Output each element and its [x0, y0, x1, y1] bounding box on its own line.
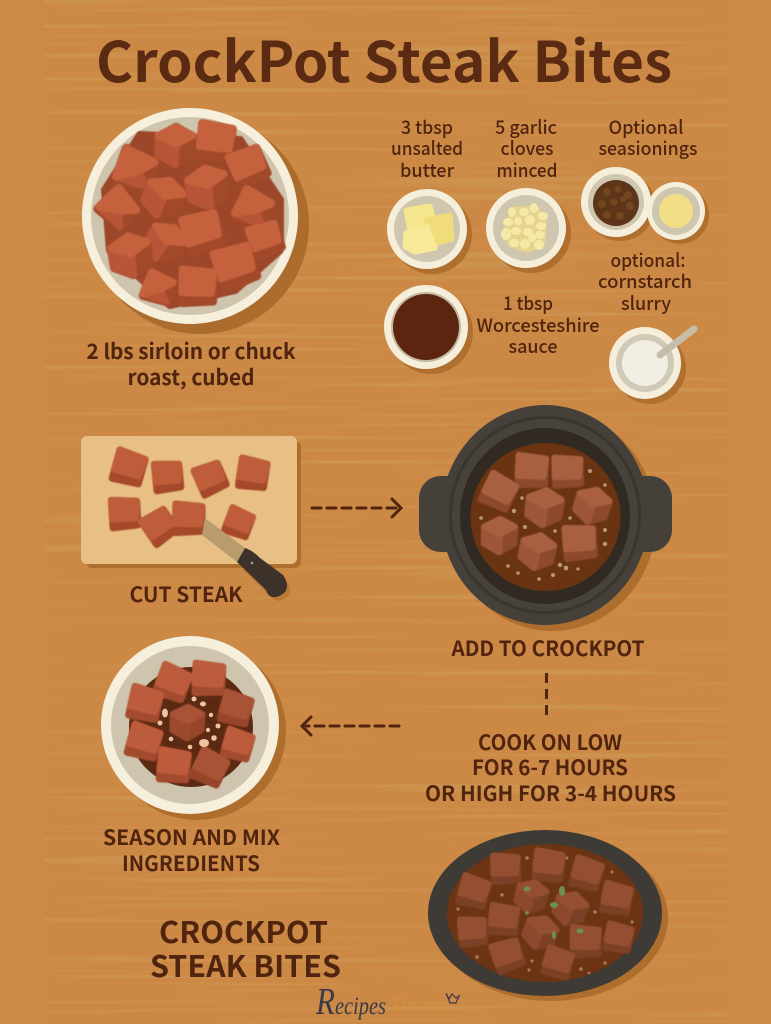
panel: finished dish: [428, 830, 668, 1001]
label: Worcestershire: 1 tbsp: [503, 290, 553, 316]
panel: steak bowl: [82, 108, 309, 334]
label: cook time: FOR 6-7 HOURS: [472, 752, 628, 782]
label: cut steak: CUT STEAK: [130, 579, 243, 609]
label: steak: [86, 336, 296, 392]
logo: Recipes: Recipes: [315, 981, 386, 1023]
logo: Recipes: Thrvem: [392, 992, 446, 1017]
logo: Recipes: [315, 981, 459, 1023]
label: steak: 2 lbs sirloin or chuck: [86, 336, 296, 366]
icon: Worcestershire bowl: [384, 285, 473, 374]
label: Worcestershire: [476, 290, 600, 359]
label: butter: 3 tbsp: [401, 114, 453, 140]
label: seasonings: Optional: [608, 114, 684, 140]
label: season and mix: SEASON AND MIX: [103, 822, 280, 852]
panel: crockpot: [419, 405, 672, 631]
label: butter: butter: [400, 157, 454, 183]
label: cornstarch: cornstarch: [598, 268, 692, 294]
arrow: down to cook: [545, 673, 548, 715]
label: butter: [391, 114, 463, 183]
label: seasonings: seasionings: [598, 135, 698, 161]
label: cornstarch: [598, 247, 692, 316]
label: closing title: CROCKPOT: [159, 908, 328, 952]
label: cook time: OR HIGH FOR 3-4 HOURS: [425, 778, 676, 808]
icon: knife: [202, 518, 290, 601]
label: garlic: minced: [496, 157, 558, 183]
label: steak: roast, cubed: [128, 362, 254, 392]
panel: cutting board: [81, 436, 301, 568]
icon: garlic bowl: [486, 188, 571, 273]
label: add to crockpot: ADD TO CROCKPOT: [451, 633, 644, 663]
icon: seasoning bowls: [581, 167, 709, 244]
label: garlic: cloves: [500, 135, 554, 161]
label: season and mix: INGREDIENTS: [122, 848, 260, 878]
label: closing title: [150, 908, 341, 986]
arrow: to crockpot: [312, 499, 401, 517]
label: Worcestershire: Worcesteshire: [476, 312, 600, 338]
label: garlic: 5 garlic: [495, 114, 557, 140]
title: CrockPot Steak Bites: [96, 18, 672, 99]
label: butter: unsalted: [391, 135, 463, 161]
label: cornstarch: optional:: [610, 247, 686, 273]
label: season and mix: [103, 822, 280, 878]
panel: seasoned bowl: [101, 636, 286, 820]
label: closing title: STEAK BITES: [150, 942, 341, 986]
label: cook time: COOK ON LOW: [478, 727, 622, 757]
icon: butter bowl: [387, 189, 472, 274]
label: garlic: [495, 114, 558, 183]
label: Worcestershire: sauce: [508, 333, 558, 359]
icon: cornstarch bowl: [609, 327, 694, 404]
label: cook time: [425, 727, 676, 808]
arrow: to seasoning: [302, 717, 399, 735]
label: seasonings: [598, 114, 698, 161]
label: cornstarch: slurry: [621, 290, 671, 316]
